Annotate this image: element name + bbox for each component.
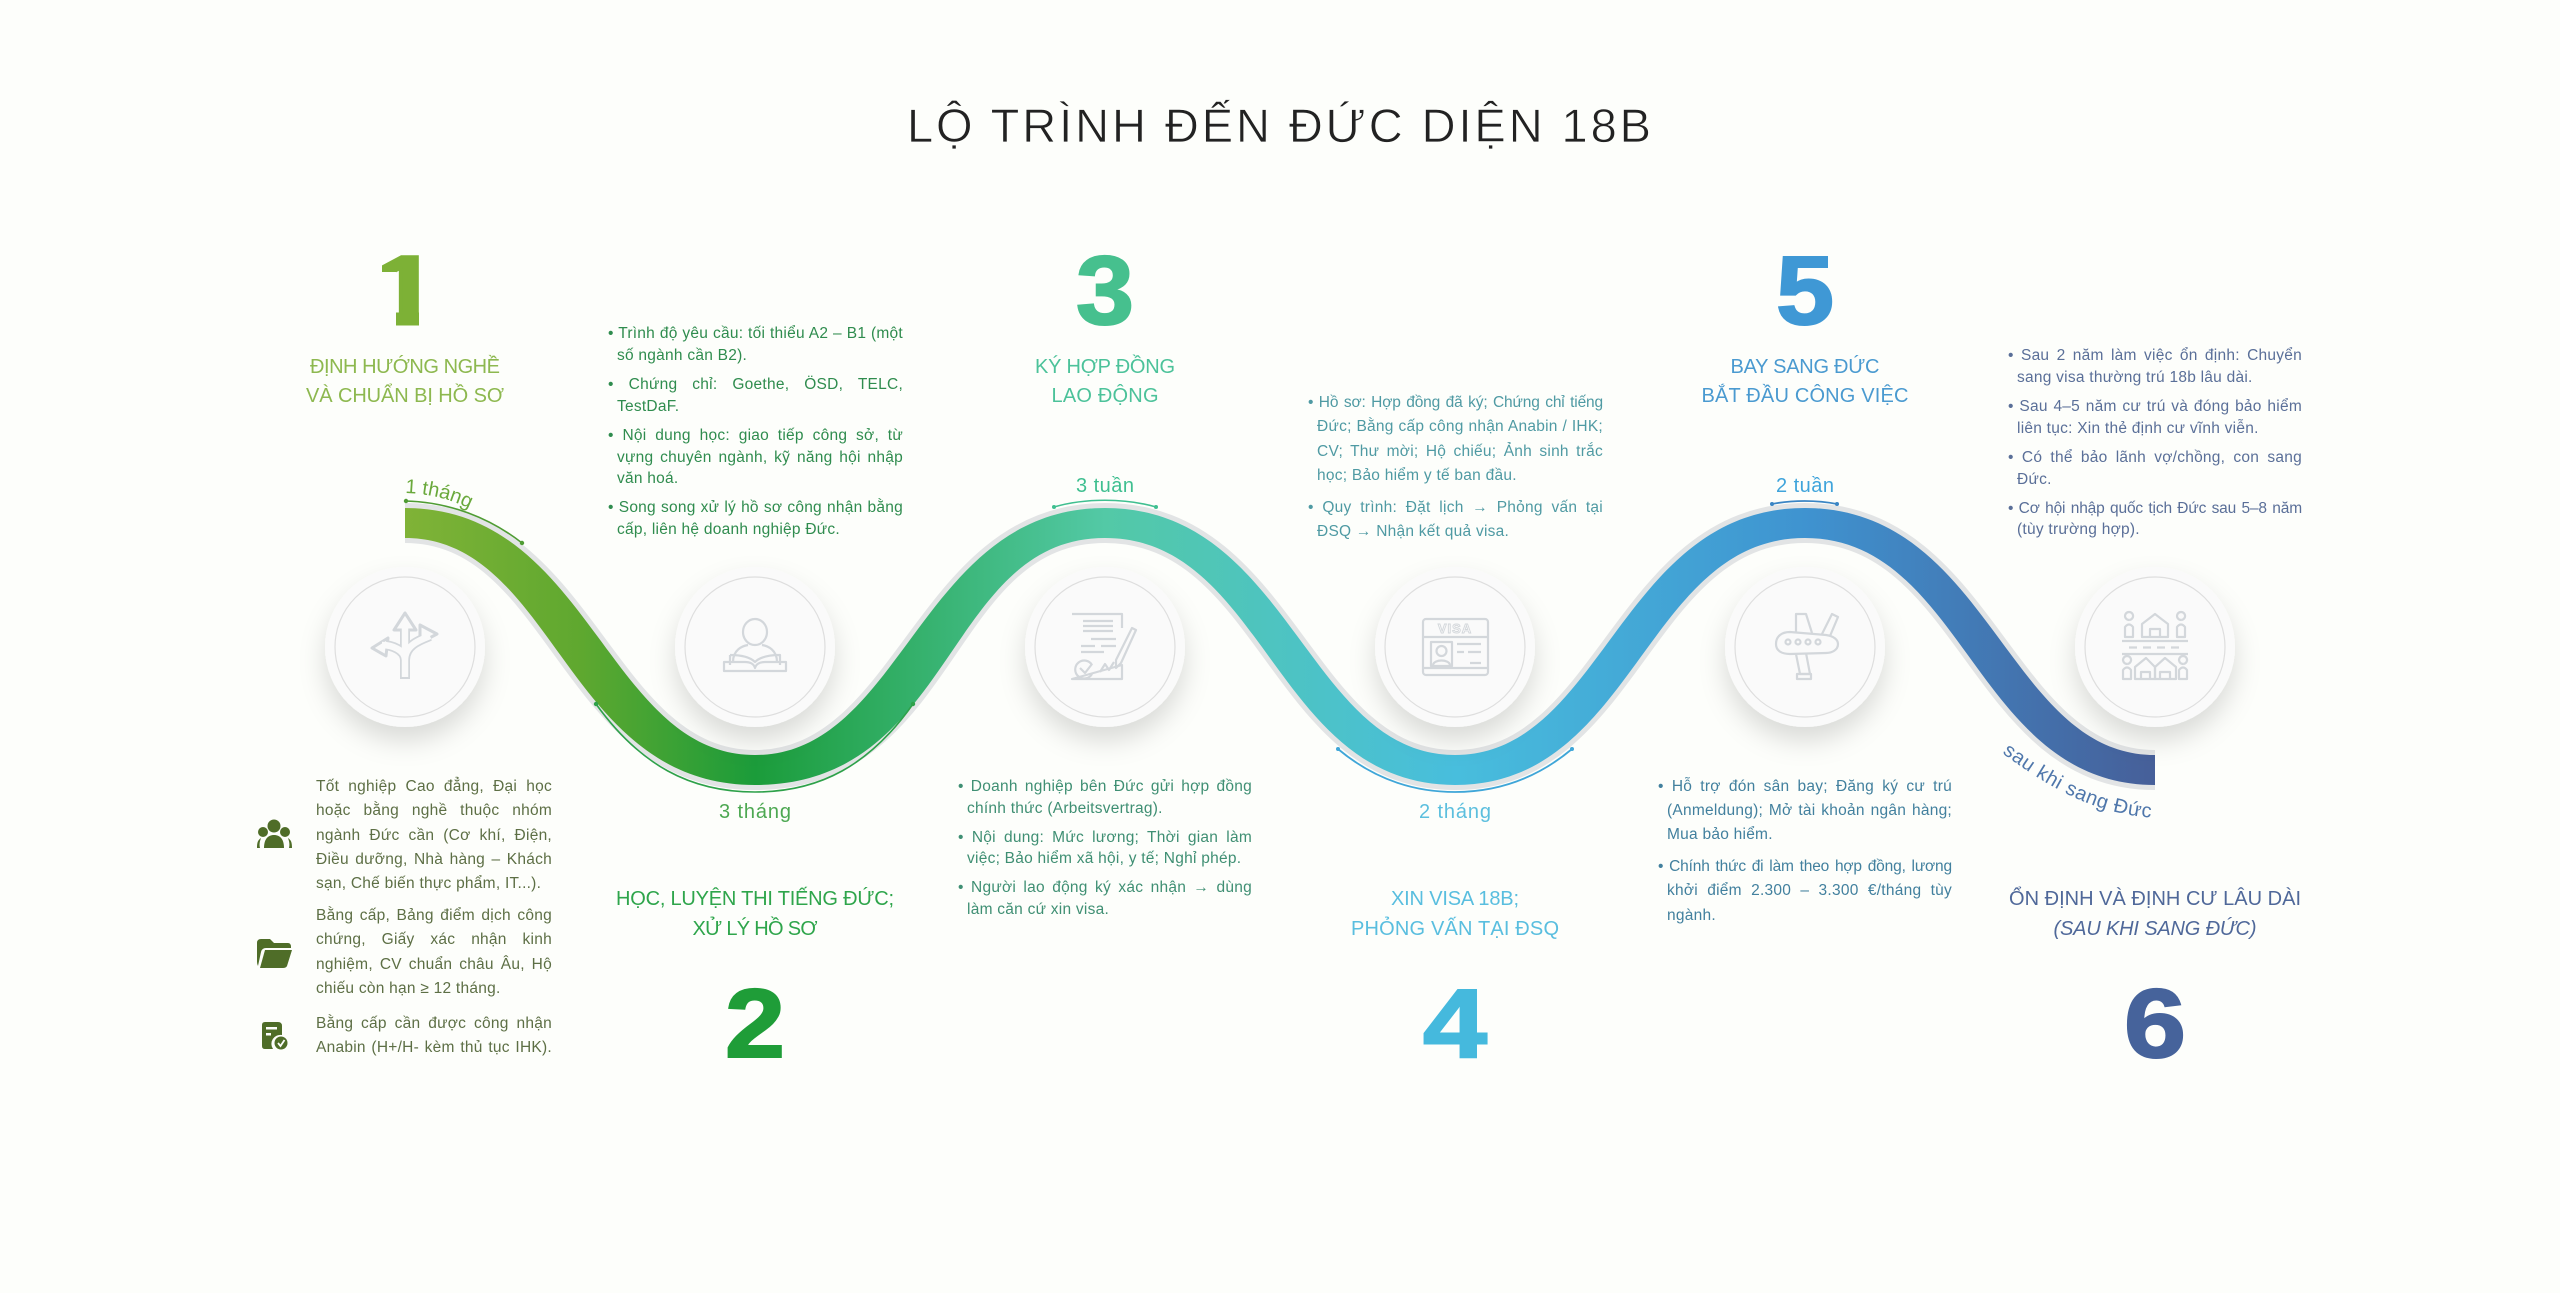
number 5: 5 <box>1776 236 1834 345</box>
text block: step 1 requirements: chiếu còn hạn ≥ 12 tháng. <box>316 980 501 997</box>
text block: step 1 requirements: Tốt nghiệp Cao đẳng, Đại học <box>316 778 552 795</box>
node: step 4 circle with visa icon <box>1375 567 1535 727</box>
title: LỘ TRÌNH ĐẾN ĐỨC DIỆN 18B <box>907 99 1651 152</box>
text block: step 2 details: văn hoá. <box>617 470 678 487</box>
duration label: 1 tháng: 1 tháng <box>406 480 472 510</box>
text block: step 1 requirements: Điều dưỡng, Nhà hàng – Khách <box>316 851 552 868</box>
text block: step 1 requirements: hoặc bằng nghề thuộc nhóm <box>316 802 552 819</box>
text block: step 3 details: • Doanh nghiệp bên Đức gửi hợp đồng <box>958 778 1252 795</box>
text block: step 1 requirements: Anabin (H+/H- kèm thủ tục IHK). <box>316 1039 552 1056</box>
heading: step 4: PHỎNG VẤN TẠI ĐSQ <box>1351 916 1559 940</box>
text block: step 4 details: • Hồ sơ: Hợp đồng đã ký; Chứng chỉ tiếng <box>1308 394 1603 411</box>
text block: step 6 details: Đức. <box>2017 471 2052 488</box>
heading: step 3 <box>1035 354 1175 407</box>
duration label: 2 tháng: 2 tháng <box>1419 801 1491 823</box>
icon: folder <box>257 939 292 968</box>
text block: step 1 requirements: nghiệm, CV chuẩn châu Âu, Hộ <box>316 956 552 973</box>
text block: step 3 details: chính thức (Arbeitsvertrag). <box>967 800 1163 816</box>
text block: step 2 details: • Nội dung học: giao tiếp công sở, từ <box>608 427 903 444</box>
text block: step 5 details: • Chính thức đi làm theo hợp đồng, lương <box>1658 858 1952 875</box>
text block: step 6 details: • Sau 4–5 năm cư trú và đóng bảo hiểm <box>2008 398 2302 415</box>
node: step 6 circle with houses icon <box>2075 567 2235 727</box>
heading: step 5: BẮT ĐẦU CÔNG VIỆC <box>1702 383 1908 407</box>
number 3: 3 <box>1076 236 1134 345</box>
text block: step 4 details: CV; Thư mời; Hộ chiếu; Ảnh sinh trắc <box>1317 443 1603 460</box>
heading: step 2: XỬ LÝ HỒ SƠ <box>692 916 818 940</box>
icon: certified document <box>262 1022 288 1050</box>
text block: step 1 requirements <box>316 776 552 1056</box>
duration label: 2 tuần: 2 tuần <box>1776 475 1834 497</box>
text block: step 4 details <box>1308 394 1603 540</box>
text block: step 4 details: Đức; Bằng cấp công nhận Anabin / IHK; <box>1317 418 1603 435</box>
heading: step 4: XIN VISA 18B; <box>1391 888 1519 910</box>
heading: step 6: (SAU KHI SANG ĐỨC) <box>2054 917 2256 940</box>
duration label: 3 tuần: 3 tuần <box>1076 475 1134 497</box>
text block: step 3 details: việc; Bảo hiểm xã hội, y tế; Nghỉ phép. <box>967 850 1241 867</box>
node: step 2 circle with reader icon <box>675 567 835 727</box>
node: step 4 circle with visa icon: VISA <box>1438 621 1472 636</box>
text block: step 2 details: • Trình độ yêu cầu: tối thiểu A2 – B1 (một <box>608 325 903 342</box>
ribbon: wavy timeline <box>405 508 2155 785</box>
text block: step 1 requirements: chứng, Giấy xác nhận kinh <box>316 931 552 948</box>
text block: step 6 details <box>2008 347 2302 538</box>
heading: step 5 <box>1702 355 1908 407</box>
text block: step 1 requirements: Bằng cấp, Bảng điểm dịch công <box>316 907 552 924</box>
text block: step 1 requirements: sạn, Chế biến thực phẩm, IT...). <box>316 875 541 892</box>
text block: step 2 details: TestDaF. <box>617 398 679 415</box>
text block: step 5 details: khởi điểm 2.300 – 3.300 €/tháng tùy <box>1667 882 1952 899</box>
text block: step 5 details: (Anmeldung); Mở tài khoản ngân hàng; <box>1667 802 1952 819</box>
heading: step 5: BAY SANG ĐỨC <box>1730 355 1880 378</box>
heading: step 2 <box>616 887 894 940</box>
node: step 3 circle with contract icon <box>1025 567 1185 727</box>
duration arc: 1 tháng <box>404 499 524 545</box>
text block: step 4 details: • Quy trình: Đặt lịch → Phỏng vấn tại <box>1308 499 1603 516</box>
text block: step 5 details: Mua bảo hiểm. <box>1667 826 1773 843</box>
node: step 5 circle with airplane icon <box>1725 567 1885 727</box>
heading: step 1: VÀ CHUẨN BỊ HỒ SƠ <box>306 383 504 407</box>
text block: step 2 details: • Song song xử lý hồ sơ công nhận bằng <box>608 499 903 516</box>
text block: step 2 details: số ngành cần B2). <box>617 347 747 364</box>
icon: people <box>257 820 292 848</box>
text block: step 2 details: cấp, liên hệ doanh nghiệp Đức. <box>617 521 840 538</box>
text block: step 3 details: • Nội dung: Mức lương; Thời gian làm <box>958 828 1252 846</box>
text block: step 3 details <box>958 778 1252 918</box>
number 6: 6 <box>2124 969 2186 1078</box>
text block: step 1 requirements: Bằng cấp cần được công nhận <box>316 1015 552 1032</box>
text block: step 6 details: liên tục: Xin thẻ định cư vĩnh viễn. <box>2017 420 2259 437</box>
text block: step 4 details: ĐSQ → Nhận kết quả visa. <box>1317 523 1509 540</box>
text block: step 3 details: làm căn cứ xin visa. <box>967 900 1109 918</box>
heading: step 4 <box>1351 888 1559 940</box>
heading: step 6: ỔN ĐỊNH VÀ ĐỊNH CƯ LÂU DÀI <box>2009 886 2301 910</box>
text block: step 2 details: • Chứng chỉ: Goethe, ÖSD, TELC, <box>608 376 903 393</box>
text block: step 2 details <box>608 325 903 538</box>
text block: step 2 details: vựng chuyên ngành, kỹ năng hội nhập <box>617 449 903 466</box>
heading: step 6 <box>2009 886 2301 940</box>
number 2: 2 <box>725 969 785 1078</box>
text block: step 4 details: học; Bảo hiểm y tế ban đầu. <box>1317 467 1517 484</box>
text block: step 1 requirements: ngành Đức cần (Cơ khí, Điện, <box>316 827 552 844</box>
heading: step 3: LAO ĐỘNG <box>1052 384 1158 407</box>
text block: step 3 details: • Người lao động ký xác nhận → dùng <box>958 879 1252 896</box>
node: step 1 circle with fork icon <box>325 567 485 727</box>
text block: step 6 details: (tùy trường hợp). <box>2017 521 2140 538</box>
text block: step 5 details <box>1658 777 1952 924</box>
heading: step 1: ĐỊNH HƯỚNG NGHỀ <box>310 355 500 378</box>
text block: step 6 details: • Cơ hội nhập quốc tịch Đức sau 5–8 năm <box>2008 500 2302 517</box>
duration label: 3 tháng: 3 tháng <box>719 801 791 823</box>
heading: step 2: HỌC, LUYỆN THI TIẾNG ĐỨC; <box>616 887 894 910</box>
duration label: sau khi sang Đức: sau khi sang Đức <box>2004 746 2152 818</box>
text block: step 5 details: • Hỗ trợ đón sân bay; Đăng ký cư trú <box>1658 778 1952 795</box>
number 1: 1 <box>373 236 439 345</box>
text block: step 5 details: ngành. <box>1667 907 1716 924</box>
text block: step 6 details: • Có thể bảo lãnh vợ/chồng, con sang <box>2008 449 2302 466</box>
duration arc: 2 tuần <box>1770 501 1839 506</box>
number 4: 4 <box>1423 969 1487 1078</box>
duration arc: 3 tuần <box>1052 500 1158 509</box>
duration arc: 3 tháng <box>594 702 915 792</box>
text block: step 6 details: • Sau 2 năm làm việc ổn định: Chuyển <box>2008 347 2302 364</box>
heading: step 1 <box>306 355 504 407</box>
text block: step 6 details: sang visa thường trú 18b lâu dài. <box>2017 369 2253 386</box>
heading: step 3: KÝ HỢP ĐỒNG <box>1035 354 1175 378</box>
duration arc: 2 tháng <box>1336 747 1574 792</box>
